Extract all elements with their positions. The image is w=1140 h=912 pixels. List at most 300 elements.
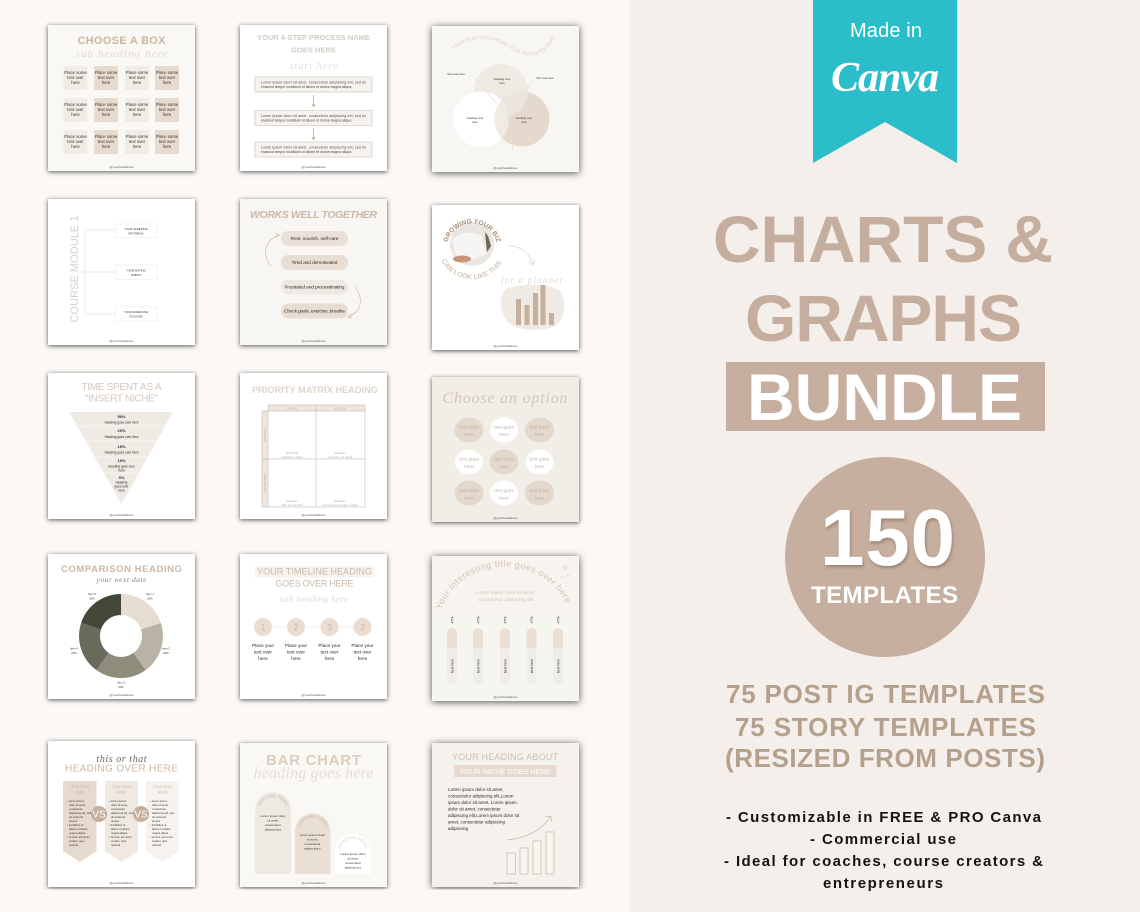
donut labels	[70, 592, 170, 689]
column text: labore et dolore	[69, 827, 88, 831]
arch text: sit amet,	[307, 838, 318, 842]
script heading: Choose an option	[442, 390, 568, 407]
step boxes: eiusmod tempor incididunt ut labore et dolore magna aliqua.	[261, 118, 352, 122]
blobs: text goes	[494, 488, 514, 494]
panel: 4-step process template: GOES HERE	[291, 46, 336, 54]
curved text top: GROWING YOUR BIZ	[444, 218, 501, 242]
grid of option boxes: Place some	[64, 102, 87, 107]
column text: consectetur	[111, 807, 125, 811]
column text: dolor sit amet,	[152, 803, 169, 807]
pyramid labels: 15%	[117, 444, 126, 449]
column text: dolor sit amet,	[69, 803, 86, 807]
column text: adipiscing elit, sed	[152, 811, 174, 815]
column text: • Ut enim ad minim	[150, 835, 173, 839]
highlighted subheading: YOUR NICHE GOES HERE	[460, 767, 551, 776]
module boxes: HABITS	[131, 273, 141, 277]
vs badges	[91, 806, 149, 822]
blobs: here	[535, 464, 545, 470]
photo circle	[450, 222, 494, 266]
grid of option boxes: here	[71, 112, 80, 117]
column text: TITLE GOES	[153, 785, 173, 789]
grid of option boxes: text over	[67, 139, 84, 144]
progress bars: 47%	[476, 616, 480, 624]
pills: Rest, nourish, self-care	[290, 236, 339, 242]
column text: veniam, quis	[69, 839, 85, 843]
heading: WORKS WELL TOGETHER	[250, 209, 377, 221]
column text: TITLE GOES	[112, 785, 132, 789]
template counts: (RESIZED FROM POSTS)	[725, 743, 1045, 773]
panel: comparison donut template	[48, 554, 195, 699]
script heading: this or that	[96, 754, 147, 765]
timeline text: Place your	[318, 643, 341, 648]
handle: @yourhandlehere	[302, 881, 326, 885]
column text: • Incididunt ut	[109, 823, 125, 827]
panel: time spent funnel template	[48, 373, 195, 519]
matrix grid: NOT IMPORTANT	[264, 473, 267, 493]
curved text bottom: CAN LOOK LIKE THIS	[442, 259, 502, 280]
blobs: here	[535, 432, 545, 438]
donut labels: 20%	[163, 651, 169, 655]
venn labels: Text over here	[447, 72, 465, 76]
venn labels: Heading over	[516, 116, 532, 120]
grid of option boxes: here	[163, 112, 172, 117]
column text: do eiusmod	[152, 815, 166, 819]
tree connector	[81, 230, 115, 314]
column text: labore et dolore	[152, 827, 171, 831]
panel: works well together template	[240, 199, 387, 345]
grid of option boxes: Place some	[64, 70, 87, 75]
feature list: - Commercial use	[810, 831, 956, 848]
grid of option boxes: Place some	[156, 134, 179, 139]
timeline: 2	[360, 622, 365, 632]
timeline text: Place your	[285, 643, 308, 648]
step boxes: Lorem ipsum dolor sit amet, consectetur adipiscing elit, sed do	[261, 146, 366, 150]
left background	[0, 0, 630, 912]
arrows between steps	[312, 95, 315, 140]
paragraph: amet, consectetur adipiscing	[448, 820, 506, 824]
subtext: Lorem ipsum dolor sit amet,	[476, 590, 535, 596]
script label: for a planner	[501, 275, 563, 285]
handle: @yourhandlehere	[494, 344, 518, 348]
matrix grid: (Who else can do it)	[281, 504, 303, 507]
handle: @yourhandlehere	[494, 166, 518, 170]
vertical heading: COURSE MODULE 1	[69, 216, 81, 322]
timeline text: here	[325, 656, 335, 661]
column text: dolor sit amet,	[111, 803, 128, 807]
step boxes: Lorem ipsum dolor sit amet, consectetur adipiscing elit, sed do	[261, 80, 366, 84]
heading: COMPARISON HEADING	[61, 564, 182, 575]
donut chart	[79, 594, 163, 678]
arch text: adipiscing e	[304, 846, 321, 850]
column text: adipiscing elit, sed	[111, 811, 133, 815]
grid of option boxes	[64, 66, 179, 154]
pyramid labels: 5%	[119, 475, 125, 480]
pyramid labels: Heading	[116, 480, 128, 484]
venn labels	[447, 72, 554, 124]
timeline text: text over	[287, 650, 305, 654]
handle: @yourhandlehere	[494, 516, 518, 520]
step boxes: Lorem ipsum dolor sit amet, consectetur adipiscing elit, sed do	[261, 114, 366, 118]
grid of option boxes: here	[102, 144, 111, 149]
progress bars	[447, 616, 563, 684]
matrix grid: (not important not urgent - delete)	[322, 504, 358, 507]
subtext	[476, 590, 535, 603]
paragraph: dolor sit amet, consectetur	[448, 806, 501, 812]
matrix grid: Delegate it	[286, 500, 298, 503]
column text: consectetur	[69, 807, 83, 811]
panel: heading about niche template	[432, 743, 579, 887]
pyramid labels: 20%	[117, 428, 126, 433]
grid of option boxes: text over	[159, 107, 176, 112]
pills: Frustrated and procrastinating	[284, 285, 345, 291]
grid of option boxes: text over	[129, 75, 146, 80]
feature list: entrepreneurs	[823, 875, 943, 892]
grid of option boxes: text over	[129, 139, 146, 144]
column text: • Ut enim ad minim	[109, 835, 132, 839]
growth bars	[507, 832, 554, 874]
column text: do eiusmod	[111, 815, 125, 819]
arch headings: HEADING HERE	[338, 836, 368, 848]
vs badges: VS	[92, 810, 106, 820]
templates label: TEMPLATES	[811, 582, 958, 609]
column text: adipiscing elit, sed	[69, 811, 91, 815]
timeline: 3	[327, 622, 332, 632]
curved heading: YOUR TEXT GOES HERE YOUR TEXT GOES HERE	[451, 36, 555, 56]
arch text: adipiscing e	[345, 866, 361, 870]
grid of option boxes: here	[133, 144, 142, 149]
blobs: here	[499, 496, 509, 502]
heading: choose a box: CHOOSE A BOX	[78, 35, 166, 47]
donut labels: 20%	[89, 596, 95, 600]
heading: TIME SPENT AS A	[82, 382, 162, 393]
matrix grid	[262, 405, 365, 507]
venn labels: here	[499, 81, 505, 85]
grid of option boxes: Place some	[64, 134, 87, 139]
heading: HEADING OVER HERE	[65, 764, 178, 774]
progress bars: text here	[530, 659, 534, 673]
matrix grid: (Important - not urgent)	[328, 456, 352, 459]
column text: veniam, quis	[152, 839, 168, 843]
grid of option boxes: Place some	[95, 70, 118, 75]
step boxes	[255, 77, 372, 157]
grid of option boxes: text over	[98, 139, 115, 144]
handle: @yourhandlehere	[110, 339, 134, 343]
column text: do eiusmod	[69, 815, 83, 819]
inverted pyramid	[69, 412, 173, 504]
grid of option boxes: Place some	[95, 102, 118, 107]
pyramid labels: 10%	[117, 458, 126, 463]
donut labels: 20%	[147, 596, 153, 600]
module boxes: PATTERNS	[128, 232, 144, 236]
curved arrow	[509, 246, 535, 265]
column text: labore et dolore	[111, 827, 130, 831]
venn labels: here	[521, 120, 527, 124]
pyramid labels: Heading goes over here	[104, 420, 139, 424]
matrix grid: Schedule it	[334, 452, 346, 455]
arch text: consectetur	[304, 842, 320, 846]
handle: @yourhandlehere	[110, 693, 134, 697]
matrix grid: DO NOW	[287, 408, 298, 410]
grid of option boxes: Place some	[126, 70, 149, 75]
timeline text: here	[258, 656, 268, 661]
pyramid labels: Heading goes over	[108, 464, 136, 468]
blobs: text goes	[459, 488, 479, 494]
150 templates circle	[785, 457, 985, 657]
arch text: Lorem ipsum dolor	[300, 833, 325, 837]
process heading: YOUR 4-STEP PROCESS NAME	[257, 33, 370, 42]
column text: • Lorem ipsum	[67, 799, 85, 803]
pyramid labels: Heading goes over here	[104, 450, 139, 454]
arch text: consectetur	[345, 861, 361, 865]
timeline text: text over	[321, 650, 339, 654]
template counts: 75 POST IG TEMPLATES	[726, 679, 1045, 709]
panel: growing your biz template	[428, 202, 583, 355]
panel: time spent funnel template: "INSERT NICHE"	[85, 394, 158, 404]
progress bars: text here	[476, 659, 480, 673]
script subheading: heading goes here	[254, 765, 374, 782]
cycle arrows	[266, 234, 360, 318]
column text: TITLE GOES	[70, 785, 91, 789]
arch text: sit amet,	[267, 818, 279, 822]
grid of option boxes: Place some	[156, 70, 179, 75]
column text: HERE	[158, 790, 168, 794]
made in label: Made in	[850, 20, 922, 42]
paragraph: consectetur adipiscing elit,Lorem	[448, 794, 514, 798]
column text: • Incididunt ut	[150, 823, 166, 827]
heading: BAR CHART	[266, 752, 361, 769]
blobs: here	[464, 496, 474, 502]
blobs: here	[464, 432, 474, 438]
made in canva ribbon	[813, 0, 957, 163]
panel: timeline template	[240, 554, 387, 699]
module boxes: YOUR EATING	[126, 268, 147, 272]
grid of option boxes: text over	[98, 75, 115, 80]
matrix grid: Eliminate it	[334, 500, 346, 503]
progress bars: 47%	[450, 616, 454, 624]
grid of option boxes: text over	[67, 107, 84, 112]
pyramid labels: here	[118, 468, 125, 472]
panel: timeline template: GOES OVER HERE	[276, 578, 354, 588]
grid of option boxes: text over	[98, 107, 115, 112]
donut labels: Item 1	[146, 592, 154, 596]
venn labels: Heading over	[467, 116, 483, 120]
column text: • Incididunt ut	[67, 823, 83, 827]
panel: choose an option template	[432, 377, 579, 522]
panel: choose a box template	[48, 25, 195, 171]
blobs: text goes	[494, 456, 514, 462]
progress bars: 47%	[530, 616, 534, 624]
timeline text: text over	[354, 650, 372, 654]
blobs: here	[499, 432, 509, 438]
module boxes: YOUR EXERCISE	[124, 310, 148, 314]
top band	[432, 556, 579, 613]
bundle banner: BUNDLE	[747, 360, 1022, 434]
heading: YOUR HEADING ABOUT	[452, 752, 558, 762]
matrix grid: DO LATER	[334, 408, 346, 410]
blobs: here	[535, 496, 545, 502]
grid of option boxes: here	[163, 144, 172, 149]
pills	[281, 231, 348, 318]
venn labels: here	[472, 120, 478, 124]
column text: • Lorem ipsum	[150, 799, 168, 803]
grid of option boxes: text over	[67, 75, 84, 80]
sparkle icon	[560, 564, 571, 579]
grid of option boxes: here	[102, 112, 111, 117]
handle: @yourhandlehere	[302, 165, 326, 169]
panel: interesting title bars template	[426, 550, 586, 708]
blobs: text goes	[530, 488, 550, 494]
panel: venn diagram template	[426, 20, 586, 180]
heading: YOUR TIMELINE HEADING	[257, 566, 372, 576]
arch text: sit amet,	[347, 856, 359, 860]
step boxes: eiusmod tempor incididunt ut labore et dolore magna aliqua.	[261, 150, 352, 154]
timeline: 2	[293, 622, 299, 632]
pyramid labels	[104, 414, 139, 492]
grid of option boxes: Place some	[95, 134, 118, 139]
paragraph: adipiscing elit,Lorem ipsum dolor sit	[448, 813, 520, 818]
pills: Check goals, exercise, breathe	[284, 309, 345, 315]
title: charts and graphs	[713, 202, 1053, 355]
venn circles	[453, 64, 550, 151]
timeline text: Place your	[252, 643, 275, 648]
donut labels: 20%	[71, 651, 77, 655]
column text: tempor	[111, 819, 119, 823]
blobs	[454, 418, 554, 506]
matrix grid: IMPORTANT	[264, 428, 267, 442]
grid of option boxes: here	[102, 80, 111, 85]
grid of option boxes: Place some	[126, 134, 149, 139]
grid of option boxes: text over	[129, 107, 146, 112]
arch text: Lorem ipsum dolor	[260, 814, 286, 818]
column text: magna aliqua.	[111, 831, 128, 835]
timeline text: here	[358, 656, 368, 661]
grid of option boxes: text over	[159, 139, 176, 144]
blobs: here	[499, 464, 509, 470]
module boxes	[116, 224, 157, 321]
feature list: - Customizable in FREE & PRO Canva	[726, 809, 1042, 826]
column text: tempor	[69, 819, 77, 823]
pyramid labels: goes over	[114, 484, 129, 488]
arch headings: HEADING HERE	[297, 815, 328, 828]
bar chart icon	[516, 285, 554, 325]
blobs: text goes	[459, 424, 479, 430]
column text: nostrud	[111, 843, 120, 847]
arch bars	[255, 792, 371, 874]
arch headings: HEADING HERE	[258, 794, 288, 806]
grid of option boxes: here	[71, 80, 80, 85]
timeline text: Place your	[351, 643, 374, 648]
right panel background	[630, 0, 1140, 912]
growth arrow	[507, 816, 552, 840]
column text: consectetur	[152, 807, 166, 811]
timeline: 1	[260, 622, 266, 632]
template counts: 75 STORY TEMPLATES	[735, 712, 1036, 742]
handle: @yourhandlehere	[302, 339, 326, 343]
grid of option boxes: here	[163, 80, 172, 85]
feature list	[724, 809, 1043, 892]
handle: @yourhandlehere	[110, 165, 134, 169]
arch text: Lorem ipsum dolor	[340, 852, 366, 856]
template counts	[725, 679, 1045, 773]
column text: • Lorem ipsum	[109, 799, 127, 803]
progress bars: text here	[450, 659, 454, 673]
grid of option boxes: here	[133, 80, 142, 85]
column text: tempor	[152, 819, 160, 823]
handle: @yourhandlehere	[302, 513, 326, 517]
paragraph	[448, 787, 520, 831]
panel: priority matrix template	[240, 373, 387, 519]
blobs: text goes	[494, 424, 514, 430]
pyramid labels: here	[118, 488, 125, 492]
title: charts and graphs: GRAPHS	[745, 281, 1022, 355]
donut labels: Item 4	[70, 646, 78, 650]
donut labels: 20%	[118, 685, 124, 689]
chevron columns	[63, 781, 179, 862]
donut labels: Item 2	[162, 646, 170, 650]
number 150: 150	[820, 493, 955, 582]
handle: @yourhandlehere	[110, 881, 134, 885]
timeline text: here	[291, 656, 301, 661]
matrix grid: Don't Delay	[286, 452, 299, 455]
column text: HERE	[117, 790, 127, 794]
blob	[501, 285, 564, 330]
column text	[67, 785, 174, 847]
column text: veniam, quis	[111, 839, 127, 843]
grid of option boxes: Place some	[126, 102, 149, 107]
grid of option boxes: text over	[159, 75, 176, 80]
timeline text: text over	[254, 650, 272, 654]
script subheading: sub heading here	[280, 594, 348, 604]
pills: Tired and demotivated	[292, 260, 338, 266]
subtext: consectetur adipiscing elit	[478, 597, 534, 603]
grid of option boxes: here	[71, 144, 80, 149]
column text: magna aliqua.	[69, 831, 86, 835]
handle: @yourhandlehere	[494, 881, 518, 885]
arch text: adipiscing e	[265, 828, 281, 832]
title: charts and graphs: CHARTS &	[713, 202, 1053, 276]
column text: HERE	[75, 790, 85, 794]
arch headings	[258, 794, 368, 848]
grid of option boxes: here	[133, 112, 142, 117]
matrix grid: (Important + urgent)	[281, 456, 303, 459]
blobs: text goes	[459, 456, 479, 462]
feature list: - Ideal for coaches, course creators &	[724, 853, 1043, 870]
paragraph: ipsum dolor sit amet, Lorem ipsum	[448, 800, 517, 805]
timeline text	[252, 643, 374, 661]
arch text: consectetur	[265, 823, 281, 827]
progress bars: text here	[556, 659, 560, 673]
blobs: text goes	[530, 456, 550, 462]
column text: nostrud	[152, 843, 161, 847]
script start here: start here	[290, 61, 338, 72]
progress bars: 47%	[556, 616, 560, 624]
handle: @yourhandlehere	[302, 693, 326, 697]
paragraph: adipiscing	[448, 826, 469, 831]
heading: PRIORITY MATRIX HEADING	[252, 385, 378, 395]
venn labels: Text over here	[536, 76, 554, 80]
step boxes: eiusmod tempor incididunt ut labore et dolore magna aliqua.	[261, 85, 352, 89]
panel: 4-step process template	[240, 25, 387, 171]
column text: • Ut enim ad minim	[67, 835, 90, 839]
donut labels: Item 3	[117, 680, 125, 684]
canva wordmark: Canva	[831, 55, 939, 101]
blobs: text goes	[530, 424, 550, 430]
panel: bar chart arches template	[236, 740, 391, 890]
blobs: here	[464, 464, 474, 470]
column text: magna aliqua.	[152, 831, 169, 835]
paragraph: Lorem ipsum dolor sit amet,	[448, 787, 504, 792]
highlighted subheading	[454, 765, 556, 777]
